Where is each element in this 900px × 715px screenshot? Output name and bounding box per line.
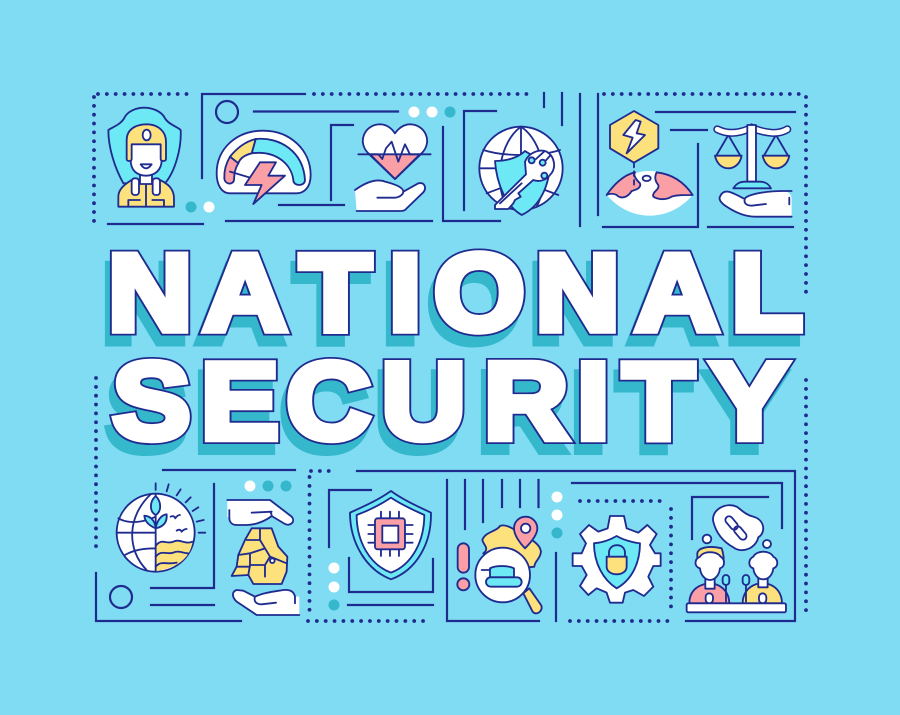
decorative frame: lines and dots (94, 93, 806, 621)
icon: magnifier over map with tank and pin (475, 517, 542, 613)
title: National Security: SECURITY (113, 340, 788, 462)
title: National Security: NATIONAL (108, 232, 803, 353)
icon: gear with shield and lock (573, 516, 661, 603)
icon: miner with shield (108, 108, 181, 207)
title: National Security: NATIONAL (108, 232, 803, 353)
icon: half globe with plant and water (117, 483, 205, 572)
icon: hands protecting yellow map (227, 500, 299, 615)
icon: energy gauge with lightning (217, 131, 311, 204)
icon: two people negotiating at a desk (687, 505, 786, 612)
icon: scales of justice on hand (715, 125, 792, 217)
icon: heart with pulse above hand (355, 124, 431, 211)
icon: globe with shield and key (479, 127, 563, 215)
icon: hexagon lightning over world map (607, 111, 693, 216)
title: National Security (108, 232, 803, 462)
title: National Security: SECURITY (113, 340, 788, 462)
icon: shield with microchip (350, 491, 431, 579)
icon: exclamation mark (457, 543, 469, 590)
